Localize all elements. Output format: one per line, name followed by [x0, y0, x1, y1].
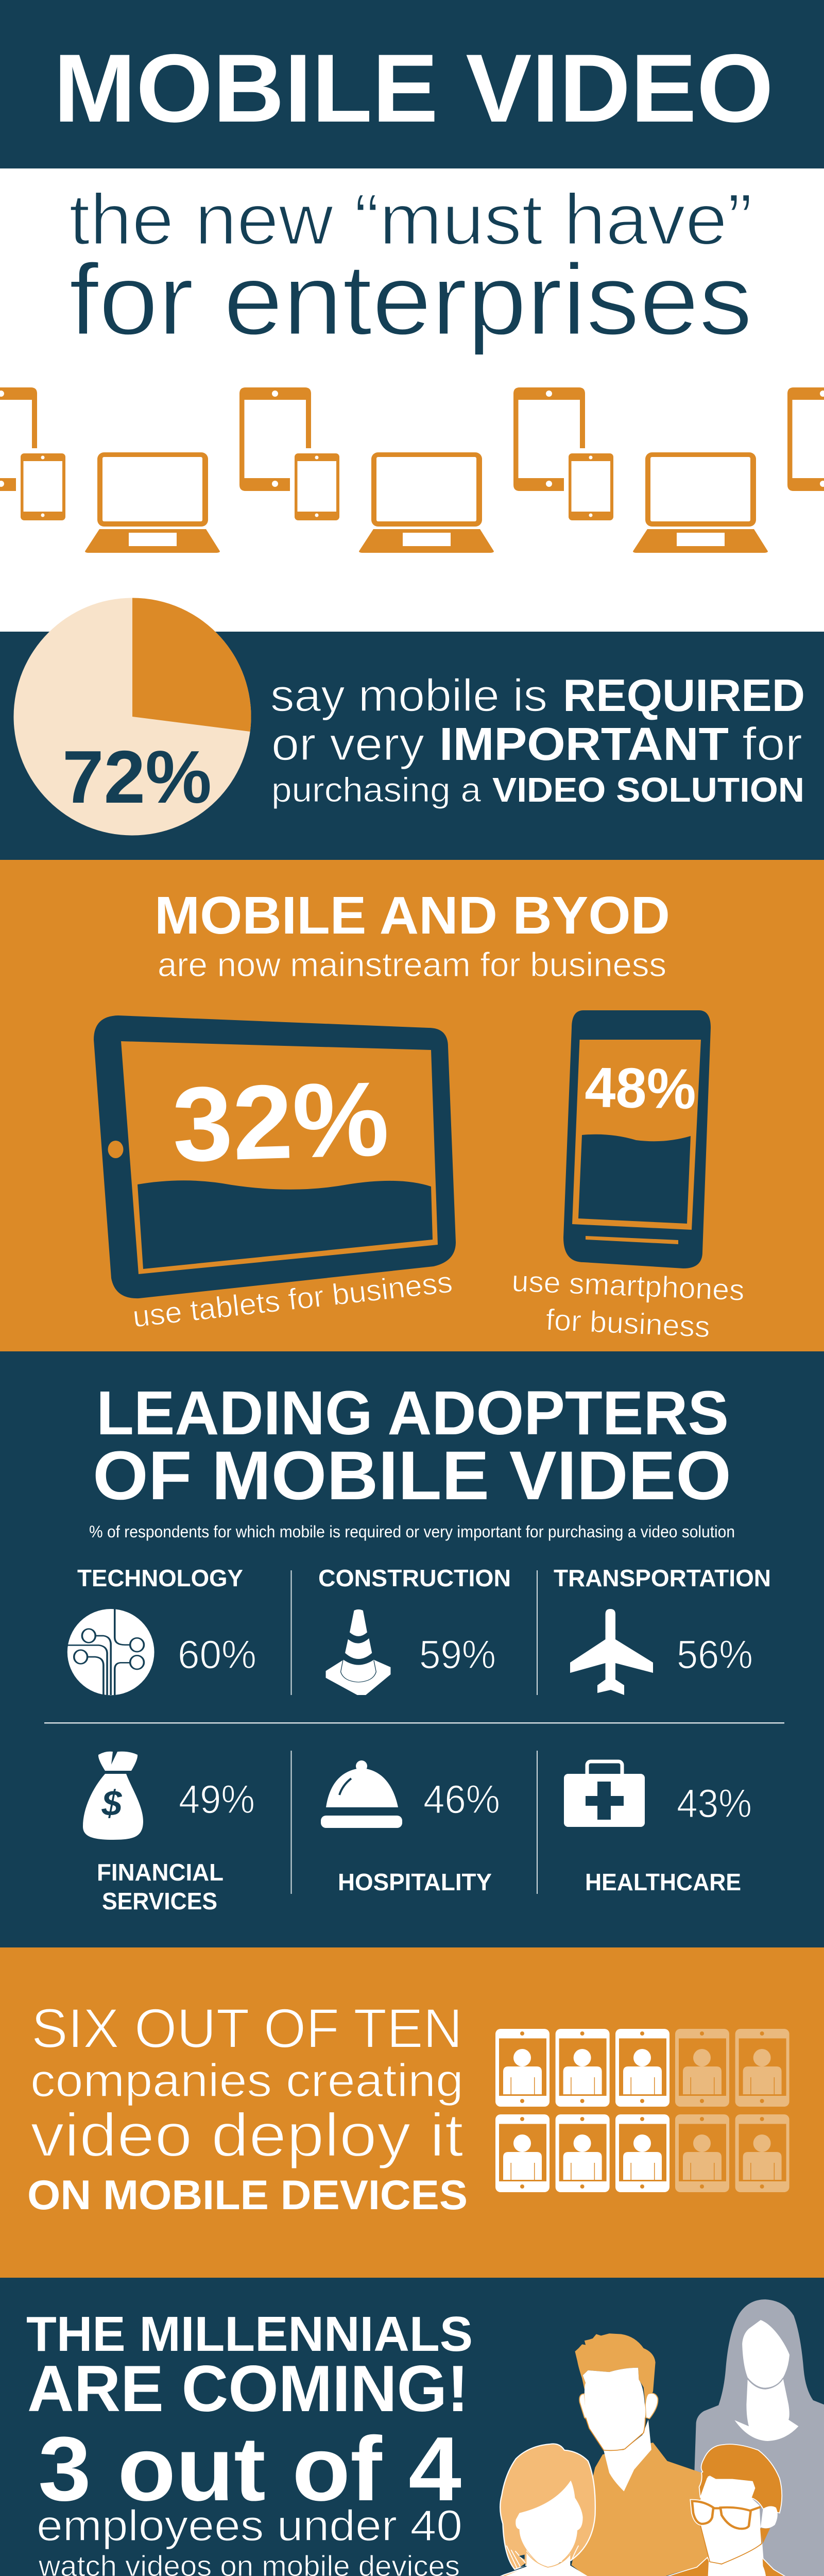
statement text: or very — [271, 719, 424, 770]
icon: money bag: $ — [101, 1783, 123, 1823]
statement text: SIX OUT OF TEN — [31, 1997, 462, 2059]
statement text: purchasing a — [271, 771, 482, 809]
item: technology — [67, 1565, 256, 1695]
icon: tablet — [94, 1015, 456, 1298]
item: hospitality — [321, 1760, 500, 1895]
smartphone caption — [511, 1264, 745, 1344]
statement text: say mobile is — [270, 670, 547, 721]
icon: service bell — [321, 1760, 402, 1828]
heading — [26, 2307, 473, 2425]
pie chart — [13, 598, 251, 836]
heading: LEADING ADOPTERS — [96, 1378, 729, 1448]
statement text: ON MOBILE DEVICES — [27, 2172, 468, 2218]
person: man with glasses — [626, 2444, 824, 2576]
panel: millennials — [0, 2278, 824, 2576]
pie value: 72% — [62, 735, 212, 819]
subtitle: the new “must have” — [69, 179, 752, 260]
item: hospitality: HOSPITALITY — [338, 1869, 492, 1895]
statement text — [270, 670, 805, 809]
heading: THE MILLENNIALS — [26, 2307, 473, 2362]
icons: device row — [0, 387, 824, 553]
statistic caption: employees under 40 — [37, 2501, 462, 2550]
tablet caption: use tablets for business — [131, 1265, 454, 1334]
item: construction — [318, 1565, 511, 1695]
statistic caption — [37, 2501, 462, 2576]
item: transportation — [554, 1565, 771, 1695]
icon: airplane — [570, 1609, 653, 1695]
icon: smartphone — [563, 1010, 711, 1268]
icon: cone — [326, 1609, 390, 1695]
illustration: four people — [460, 2299, 824, 2576]
person: woman with bob — [460, 2444, 632, 2576]
item: financial services: FINANCIAL — [97, 1859, 224, 1886]
item: technology: TECHNOLOGY — [77, 1565, 243, 1591]
heading: OF MOBILE VIDEO — [93, 1437, 731, 1514]
statement text: video deploy it — [30, 2101, 464, 2170]
subtitle: for enterprises — [69, 243, 752, 356]
note: % of respondents for which mobile is required or very important for purchasing a video solution — [89, 1522, 735, 1541]
icon: circuit — [67, 1609, 154, 1695]
item: healthcare: 43% — [677, 1781, 752, 1826]
smartphone value: 48% — [585, 1056, 697, 1121]
statement text: IMPORTANT — [439, 719, 729, 770]
panel: six out of ten — [0, 1947, 824, 2278]
heading: ARE COMING! — [27, 2352, 469, 2425]
icon: first aid kit — [564, 1761, 645, 1827]
item: construction: CONSTRUCTION — [318, 1565, 511, 1591]
item: healthcare: HEALTHCARE — [585, 1869, 741, 1895]
tablet value: 32% — [171, 1060, 390, 1184]
statement text: REQUIRED — [563, 670, 805, 721]
big statistic: 3 out of 4 — [38, 2418, 461, 2520]
statement text: VIDEO SOLUTION — [492, 771, 804, 809]
item: financial services — [83, 1752, 255, 1914]
item: technology: 60% — [178, 1632, 256, 1677]
panel: mobile and BYOD — [0, 860, 824, 1351]
icons: phone grid — [495, 2029, 789, 2192]
item: financial services: SERVICES — [102, 1888, 217, 1914]
item: financial services: 49% — [179, 1776, 255, 1822]
statement text — [27, 1997, 468, 2218]
item: construction: 59% — [419, 1632, 496, 1677]
item: transportation: TRANSPORTATION — [554, 1565, 771, 1591]
smartphone caption: use smartphones — [511, 1264, 745, 1307]
icon: money bag — [83, 1752, 143, 1840]
statement text: companies creating — [30, 2055, 464, 2107]
subheading: are now mainstream for business — [158, 945, 666, 984]
item: healthcare — [564, 1761, 752, 1895]
person: man with spiky hair — [572, 2333, 709, 2576]
heading — [93, 1378, 731, 1514]
panel: header — [0, 0, 824, 168]
person: grey woman — [694, 2299, 824, 2576]
subtitle — [69, 179, 752, 356]
item: hospitality: 46% — [423, 1776, 500, 1822]
panel: 72 percent — [0, 598, 824, 860]
smartphone caption: for business — [545, 1303, 711, 1344]
heading: MOBILE AND BYOD — [154, 886, 670, 945]
item: transportation: 56% — [677, 1632, 753, 1677]
title: MOBILE VIDEO — [54, 34, 774, 142]
statement text: for — [742, 719, 802, 770]
panel: leading adopters — [0, 1351, 824, 1947]
